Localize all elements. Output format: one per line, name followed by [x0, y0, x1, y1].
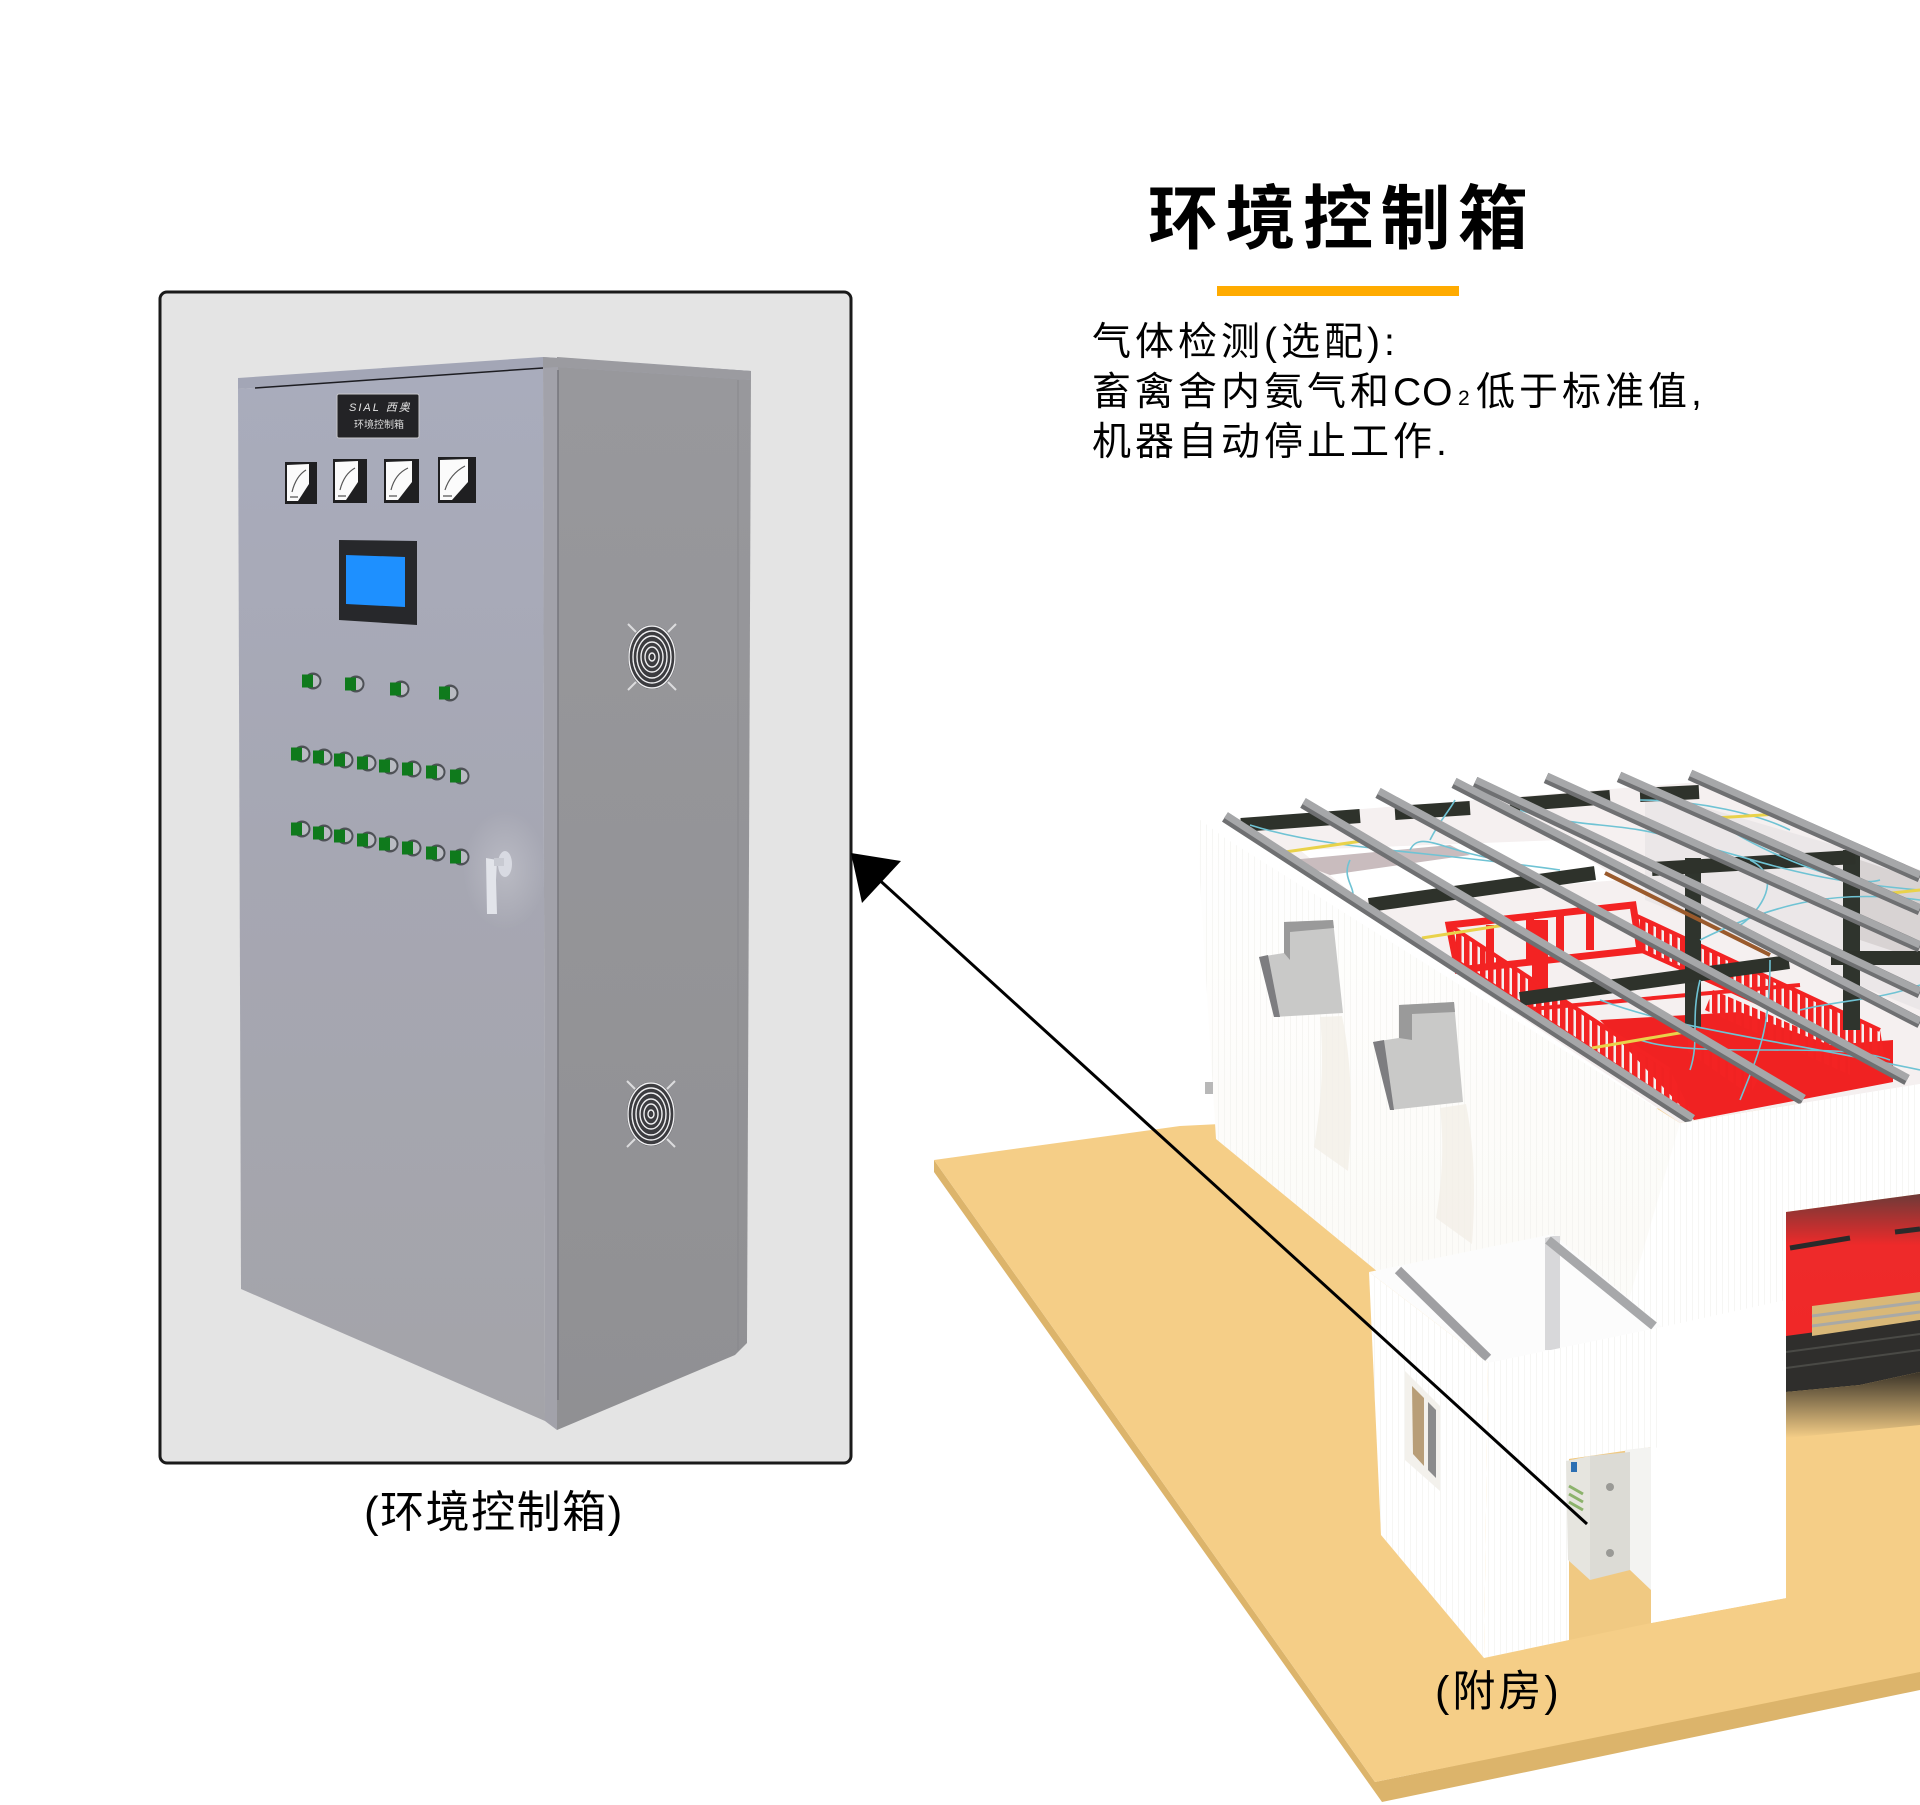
annex left wall [1369, 1272, 1488, 1658]
title: 环境控制箱 [1148, 180, 1536, 258]
cabinet body [238, 357, 751, 1430]
nameplate [337, 394, 419, 438]
lower fan [627, 1081, 675, 1147]
title underline [1217, 286, 1459, 296]
description text: 气体检测(选配): [1092, 321, 1399, 364]
annex front wall [1484, 1300, 1786, 1658]
analog meters [285, 457, 476, 504]
caption: annex: (附房) [1435, 1668, 1562, 1716]
building: henhouse [1196, 773, 1920, 1623]
touch screen [339, 540, 417, 625]
description text: 畜禽舍内氨气和CO [1092, 371, 1454, 414]
nameplate: SIAL 西奥 [349, 401, 412, 414]
control box in annex [1566, 1452, 1630, 1580]
arrow from annex box to cabinet panel [851, 853, 1587, 1524]
panel frame [160, 292, 851, 1463]
front wall [1600, 1084, 1920, 1623]
annex window [1405, 1371, 1440, 1491]
description text: 2 [1458, 387, 1470, 410]
door handle [486, 851, 512, 914]
annex inner [1369, 1234, 1662, 1363]
caption: cabinet: (环境控制箱) [364, 1488, 624, 1537]
upper fan [628, 624, 676, 690]
red crates [1449, 905, 1893, 1120]
indicator buttons row 2 [291, 746, 470, 784]
copper pipe [1605, 873, 1770, 955]
panel: environment control cabinet [160, 292, 851, 1463]
rails [1225, 773, 1920, 1120]
door opening with vehicle interior [1786, 1194, 1920, 1438]
dark beams [1241, 792, 1920, 999]
left wall [1196, 817, 1680, 1520]
indicator buttons row 3 [291, 820, 470, 866]
indicator buttons row 1 [302, 672, 458, 702]
annex room [1369, 1234, 1786, 1658]
ground plate [934, 1100, 1920, 1802]
nameplate: 环境控制箱 [354, 418, 404, 431]
grey ventilation box 2 [1373, 1002, 1463, 1110]
door of annex [1569, 1447, 1651, 1640]
posts [1685, 850, 1860, 1030]
description text [1092, 321, 1706, 464]
blue wires [1250, 800, 1920, 1100]
description text: 低于标准值, [1476, 371, 1706, 414]
description text: 机器自动停止工作. [1092, 421, 1451, 464]
yellow wires [1285, 814, 1920, 1048]
grey ventilation box 1 [1259, 920, 1343, 1017]
roof interior [1225, 782, 1920, 1123]
